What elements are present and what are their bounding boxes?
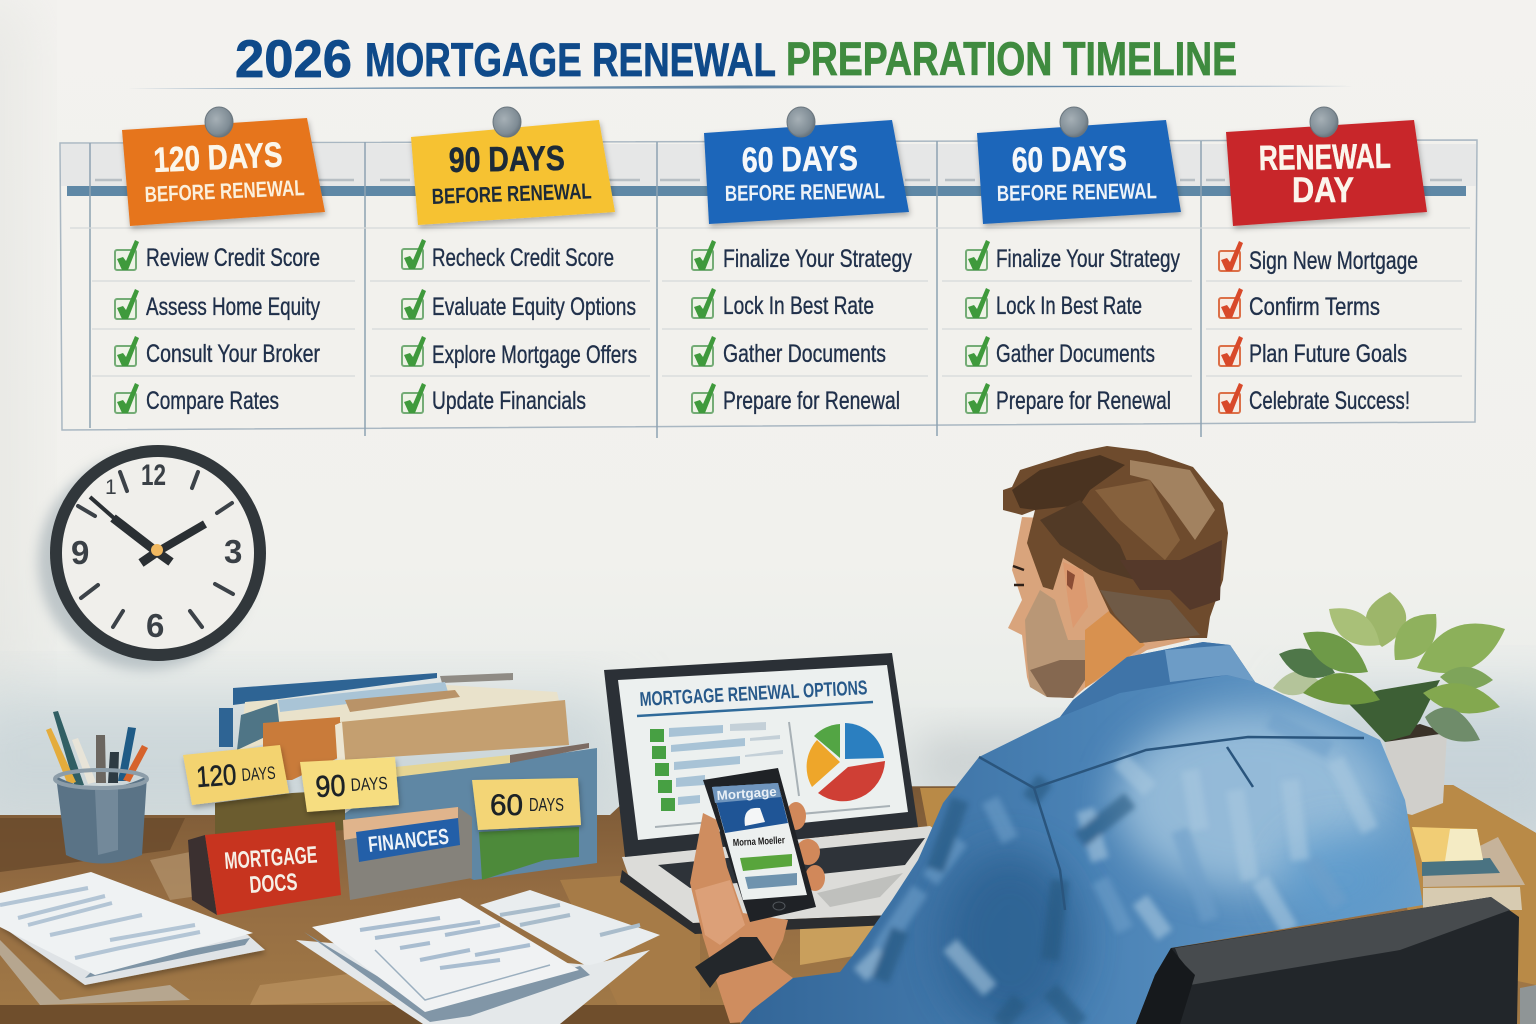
- checklist: Sign New Mortgage: [1249, 247, 1418, 275]
- laptop: [604, 653, 950, 934]
- red mortgage docs folder: MORTGAGE: [224, 842, 318, 875]
- wall clock: 9: [71, 534, 89, 571]
- red mortgage docs folder: DOCS: [249, 869, 298, 899]
- sticky: 120 days: DAYS: [241, 763, 276, 785]
- note: 60 days: BEFORE RENEWAL: [725, 178, 885, 206]
- screen checklist: [650, 722, 783, 811]
- checklist: Gather Documents: [723, 340, 886, 368]
- red mortgage docs folder: [188, 822, 341, 915]
- pin: [787, 107, 815, 137]
- papers right: [296, 890, 660, 1024]
- checklist: Recheck Credit Score: [432, 244, 614, 272]
- checklist: Prepare for Renewal: [723, 387, 900, 415]
- checklist: Assess Home Equity: [146, 293, 320, 321]
- man: [740, 446, 1440, 1024]
- file organizer: [183, 673, 597, 915]
- wall clock: 12: [141, 459, 166, 492]
- sticky: 60 days: DAYS: [529, 795, 564, 815]
- column 1: 120 days: [115, 107, 325, 415]
- hand holding phone: [690, 768, 825, 1023]
- wall clock: 6: [146, 607, 164, 644]
- fingers: [786, 802, 825, 891]
- checklist: Lock In Best Rate: [996, 292, 1142, 320]
- checklist: Prepare for Renewal: [996, 387, 1171, 415]
- sticky: 90 days: DAYS: [350, 773, 388, 795]
- sticky: 60 days: 60: [490, 789, 523, 822]
- pot: [1385, 733, 1447, 815]
- note: 120 days: [122, 118, 325, 226]
- pin: [493, 107, 521, 137]
- wall clock: 3: [224, 533, 242, 570]
- sticky: 90 days: 90: [315, 769, 346, 804]
- title: PREPARATION TIMELINE: [786, 32, 1237, 85]
- checklist: Explore Mortgage Offers: [432, 341, 637, 369]
- leaves: [1273, 592, 1505, 742]
- plant: [1273, 592, 1505, 815]
- column 2: 90 days: [402, 107, 637, 415]
- checklist: Update Financials: [432, 387, 586, 415]
- hair: [1003, 446, 1228, 643]
- note: renewal day: DAY: [1292, 171, 1354, 210]
- grey finances folder: [343, 807, 472, 900]
- organizer box: [340, 748, 597, 880]
- book stack: [1412, 827, 1525, 910]
- collar: [1060, 642, 1255, 717]
- green folder: [479, 827, 579, 880]
- pencil cup: [46, 711, 148, 864]
- shirt: [740, 640, 1440, 1024]
- checklist: Confirm Terms: [1249, 293, 1380, 321]
- column 5: renewal day: [1219, 107, 1427, 415]
- wall clock: 1: [105, 476, 117, 499]
- title: 2026: [235, 30, 352, 89]
- laptop base: [620, 826, 950, 934]
- note: 90 days: 90 DAYS: [448, 139, 565, 180]
- title: [124, 30, 1355, 89]
- note: 60 days second: 60 DAYS: [1011, 139, 1127, 180]
- sticky: 90 days: [300, 757, 399, 812]
- grey finances folder: FINANCES: [367, 824, 450, 857]
- note: renewal day: [1226, 120, 1427, 226]
- palm and arm: [690, 813, 793, 1023]
- checklist: Gather Documents: [996, 340, 1155, 368]
- checklist: Plan Future Goals: [1249, 340, 1407, 368]
- note: 60 days second: BEFORE RENEWAL: [997, 178, 1157, 206]
- checklist: Review Credit Score: [146, 244, 320, 272]
- office chair: [1136, 897, 1519, 1024]
- checklist: Compare Rates: [146, 387, 279, 415]
- panel: calendar timeline board: [60, 107, 1477, 438]
- column 4: 60 days: [966, 107, 1181, 415]
- pie chart: [807, 723, 885, 801]
- pin: [1060, 107, 1088, 137]
- desk: [0, 785, 1536, 1024]
- phone: Morna Moeller: [733, 835, 785, 849]
- column 3: 60 days: [692, 107, 912, 415]
- sticky: 120 days: 120: [195, 759, 237, 794]
- note: 90 days: [411, 120, 615, 225]
- checklist: Lock In Best Rate: [723, 292, 874, 320]
- pin: [205, 107, 233, 137]
- checklist: Finalize Your Strategy: [723, 245, 912, 273]
- screen title: MORTGAGE RENEWAL OPTIONS: [639, 677, 868, 711]
- note: 120 days: BEFORE RENEWAL: [144, 175, 305, 207]
- sticky: 120 days: [183, 745, 289, 805]
- checklist: [966, 240, 1180, 415]
- checklist: Celebrate Success!: [1249, 387, 1410, 415]
- note: 60 days second: [977, 120, 1181, 224]
- note: 90 days: BEFORE RENEWAL: [431, 178, 592, 209]
- title: MORTGAGE RENEWAL: [365, 33, 776, 86]
- checklist: Finalize Your Strategy: [996, 245, 1180, 273]
- neck and face: [1008, 517, 1190, 698]
- note: 120 days: 120 DAYS: [153, 135, 283, 180]
- checklist: [1219, 241, 1418, 415]
- note: renewal day: RENEWAL: [1258, 137, 1391, 178]
- wall clock: [38, 445, 266, 670]
- checklist: [692, 240, 912, 415]
- checklist: [115, 240, 320, 415]
- papers left: [0, 872, 265, 1005]
- phone: Mortgage: [716, 784, 777, 803]
- note: 60 days: 60 DAYS: [741, 139, 858, 180]
- checklist: Evaluate Equity Options: [432, 293, 636, 321]
- watch: [695, 937, 773, 988]
- ear: [1063, 562, 1088, 628]
- back folders: [219, 673, 569, 780]
- sticky: 60 days: [472, 778, 581, 830]
- checklist: Consult Your Broker: [146, 340, 320, 368]
- note: 60 days: [704, 120, 909, 224]
- axis line: [655, 722, 890, 827]
- pin: [1310, 107, 1338, 137]
- laptop screen: [604, 653, 918, 857]
- phone: [703, 768, 816, 922]
- seams: [979, 737, 1364, 910]
- checklist: [402, 239, 637, 415]
